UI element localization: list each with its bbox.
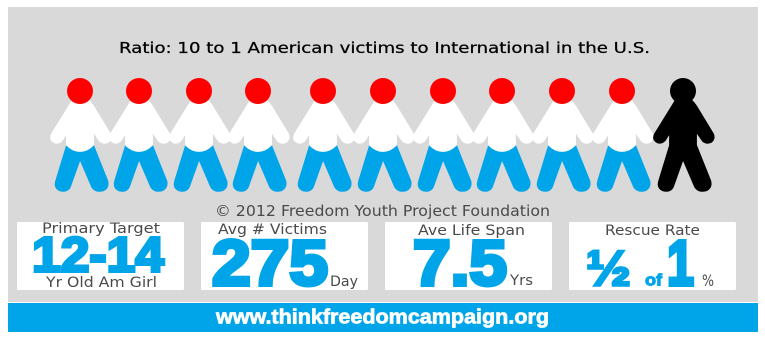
figure 6 <box>354 78 414 191</box>
figure 7 <box>414 78 474 191</box>
card: average life span <box>385 222 552 299</box>
figure 9 <box>533 78 593 191</box>
title: Ratio: 10 to 1 American victims to International in the U.S. <box>119 39 650 57</box>
card: primary target: Primary Target <box>42 221 161 237</box>
website banner: www.thinkfreedomcampaign.org <box>215 306 549 328</box>
card: rescue rate: 1 <box>667 227 694 299</box>
people row: ten American victims and one international victim <box>51 78 714 191</box>
card: average victims: Avg # Victims <box>218 222 327 238</box>
figure 3 <box>170 78 230 191</box>
figure 10 <box>593 78 653 191</box>
figure 11: black international victim <box>654 78 714 191</box>
card: average victims: 275 <box>212 227 328 299</box>
card: rescue rate: % <box>702 271 714 290</box>
card: primary target: Yr Old Am Girl <box>45 275 157 291</box>
figure 2 <box>110 78 170 191</box>
card: primary target <box>17 221 184 291</box>
card: rescue rate: ½ <box>586 240 631 296</box>
copyright line: © 2012 Freedom Youth Project Foundation <box>215 202 550 220</box>
card: rescue rate <box>569 222 736 299</box>
card: rescue rate: Rescue Rate <box>605 223 700 239</box>
card: rescue rate: of <box>645 270 662 290</box>
figure 8 <box>473 78 533 191</box>
card: average life span: Ave Life Span <box>418 223 525 239</box>
card: average life span: Yrs <box>509 273 533 289</box>
card: primary target: 12-14 <box>32 228 164 282</box>
website banner <box>8 303 758 332</box>
card: average victims: Day <box>330 274 358 290</box>
figure 4 <box>229 78 289 191</box>
card: average victims <box>201 222 368 299</box>
card: average life span: 7.5 <box>413 227 507 299</box>
figure 5 <box>294 78 354 191</box>
figure 1 <box>51 78 111 191</box>
